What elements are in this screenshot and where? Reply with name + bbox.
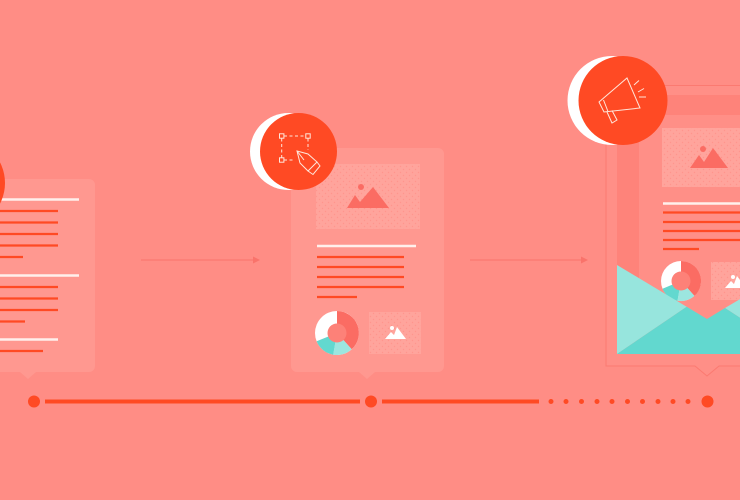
image placeholder: large	[316, 164, 420, 229]
timeline	[28, 396, 714, 408]
donut chart: second document	[315, 311, 359, 355]
arrow: second to third	[470, 256, 588, 264]
timeline: start marker	[28, 396, 40, 408]
image placeholder: small	[711, 262, 740, 300]
icon: first step red circle	[0, 138, 5, 228]
megaphone glyph	[599, 78, 646, 123]
text lines: third document	[663, 204, 740, 249]
timeline: dotted segment	[548, 399, 690, 404]
panel: first document	[0, 179, 95, 379]
timeline: solid segment one	[45, 400, 360, 404]
frame band: side	[617, 95, 639, 295]
panel: third document frame	[606, 86, 740, 376]
timeline: end marker	[702, 396, 714, 408]
arrow: first to second	[141, 256, 260, 264]
timeline: middle marker	[365, 396, 377, 408]
image placeholder: large	[662, 128, 740, 187]
frame band: top	[617, 95, 740, 115]
text lines: second document	[317, 246, 416, 297]
icon: megaphone badge	[568, 56, 668, 145]
text lines: first document	[0, 200, 79, 351]
panel: second document	[291, 148, 444, 379]
pen tool glyph	[280, 134, 320, 174]
icon: pen tool badge	[250, 113, 337, 190]
image placeholder: small	[369, 312, 421, 354]
envelope	[617, 265, 740, 354]
donut chart: third document	[661, 261, 701, 301]
timeline: solid segment two	[382, 400, 539, 404]
